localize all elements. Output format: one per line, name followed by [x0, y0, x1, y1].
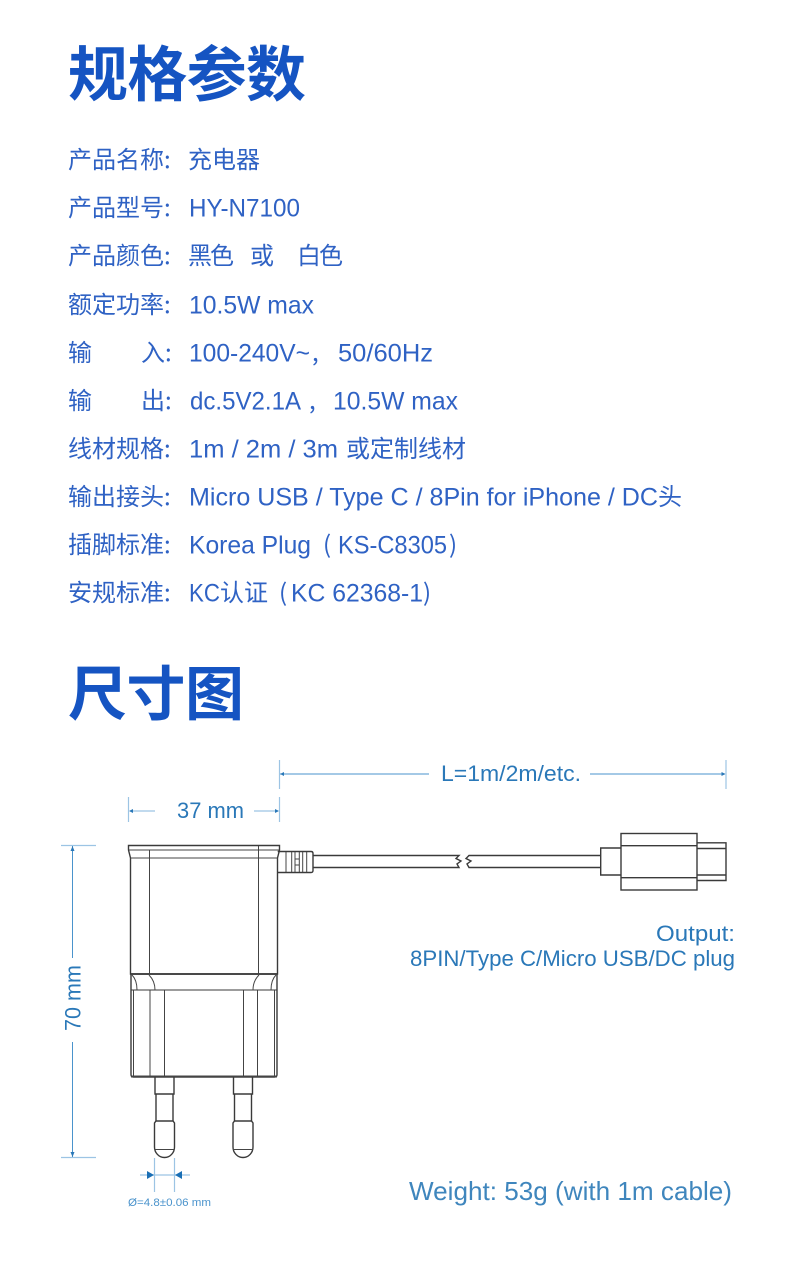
dimension: width 37 mm: 37 mm	[177, 798, 244, 823]
spec row: output	[68, 381, 458, 416]
charger top body	[128, 846, 280, 974]
spec row: cable	[68, 429, 466, 464]
cable strain relief	[278, 852, 313, 872]
spec row: input: 100-240V~	[189, 340, 310, 368]
spec row: connector: Micro USB / Type C / 8Pin for iPhone / DC	[189, 484, 658, 512]
charger drawing	[128, 834, 726, 1158]
spec row: connector: 输出接头:	[68, 477, 171, 512]
spec row: cable: 1m / 2m / 3m	[189, 436, 338, 464]
dimension: width 37 mm	[128, 797, 280, 823]
spec row: plug standard: (	[323, 525, 331, 560]
spec row: product name: 产品名称:	[68, 140, 171, 175]
spec row: model: 产品型号:	[68, 188, 171, 223]
spec row: input: 50/60Hz	[338, 340, 433, 368]
spec row: colour: 白色	[297, 236, 343, 271]
spec row: output: 10.5W max	[333, 388, 458, 416]
spec row: safety standard: KC	[189, 580, 220, 608]
spec row: plug standard: )	[449, 525, 457, 560]
output label: 8PIN/Type C/Micro USB/DC plug	[410, 946, 735, 971]
spec row: safety standard: (	[279, 573, 287, 608]
spec row: model	[68, 188, 300, 223]
spec row: output: dc.5V2.1A	[190, 388, 301, 416]
spec row: rated power: 10.5W max	[189, 292, 314, 320]
spec row: plug standard: 插脚标准:	[68, 525, 171, 560]
spec row: connector: 头	[658, 477, 682, 512]
spec row: product name	[68, 140, 260, 175]
spec row: colour: 产品颜色:	[68, 236, 171, 271]
spec row: input: 入:	[141, 333, 172, 368]
dimension: height 70 mm: 70 mm	[60, 965, 86, 1031]
output label	[410, 921, 735, 971]
title: specifications: 规格参数	[68, 27, 306, 114]
spec row: colour: 或	[250, 236, 274, 271]
spec row: input: 输	[68, 333, 92, 368]
spec row: safety standard	[68, 573, 431, 608]
spec row: safety standard: )	[423, 573, 431, 608]
spec table	[68, 140, 682, 608]
spec row: rated power: 额定功率:	[68, 285, 171, 320]
spec row: colour	[68, 236, 343, 271]
spec row: colour: 黑色	[188, 236, 234, 271]
spec row: cable: 线材规格:	[68, 429, 171, 464]
dimension: cable length: L=1m/2m/etc.	[441, 761, 581, 786]
dimension: height 70 mm	[60, 846, 96, 1158]
spec row: output: ,	[309, 381, 316, 416]
dimension: pin diameter	[128, 1158, 211, 1209]
spec row: input: ,	[312, 333, 319, 368]
spec row: connector	[68, 477, 682, 512]
spec row: rated power	[68, 285, 314, 320]
plug pin right	[233, 1077, 253, 1158]
plug pin left	[154, 1077, 174, 1158]
title: dimensions: 尺寸图	[68, 647, 244, 732]
connector	[601, 834, 726, 890]
spec row: input	[68, 333, 433, 368]
charger lower body	[131, 974, 277, 1077]
spec row: safety standard: 安规标准:	[68, 573, 171, 608]
dimension: pin diameter: Ø=4.8±0.06 mm	[128, 1197, 211, 1209]
spec row: cable: 或定制线材	[346, 429, 466, 464]
spec row: product name: 充电器	[188, 140, 260, 175]
dimension: cable length	[280, 760, 726, 789]
spec row: plug standard	[68, 525, 457, 560]
cable	[313, 856, 600, 868]
spec row: plug standard: KS-C8305	[338, 532, 447, 560]
spec row: model: HY-N7100	[189, 194, 300, 222]
spec row: plug standard: Korea Plug	[189, 532, 311, 560]
spec row: output: 输	[68, 381, 92, 416]
spec row: safety standard: KC 62368-1	[291, 580, 423, 608]
spec row: output: 出:	[141, 381, 172, 416]
weight note: Weight: 53g (with 1m cable)	[409, 1176, 732, 1206]
output label: Output:	[656, 921, 735, 946]
spec row: safety standard: 认证	[220, 573, 268, 608]
